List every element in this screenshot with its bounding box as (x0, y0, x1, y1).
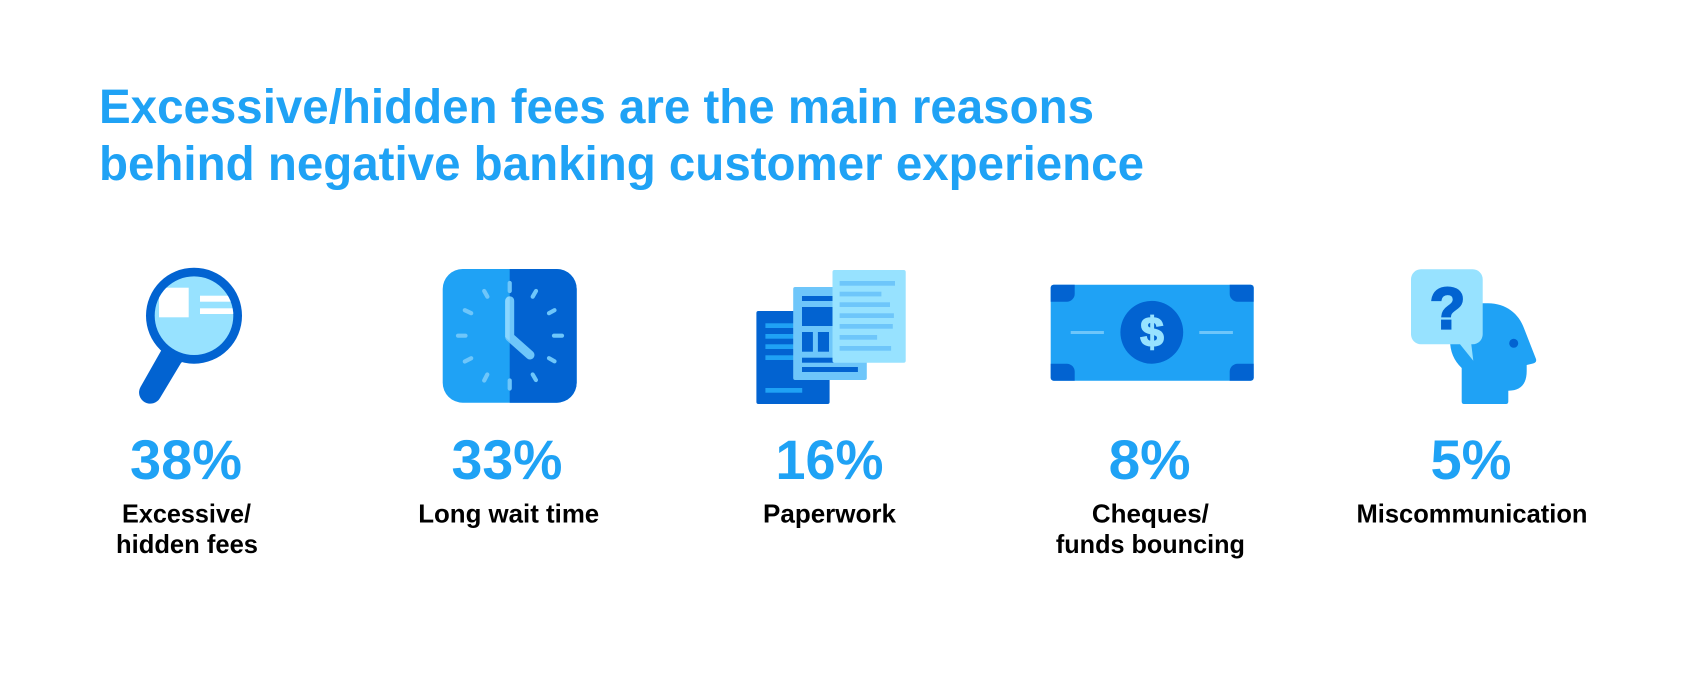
icon: banknote (1051, 285, 1254, 381)
label: cheques/funds bouncing: funds bouncing (1056, 529, 1245, 559)
icon: stacked documents (756, 270, 906, 404)
label: cheques/funds bouncing (1056, 498, 1245, 559)
stat: 5%: 5% (1430, 428, 1512, 491)
panel: cheques/funds bouncing (1051, 285, 1254, 559)
stat: 33%: 33% (452, 428, 562, 491)
title: Excessive/hidden fees are the main reasons (99, 81, 1094, 134)
panel: miscommunication (1356, 269, 1588, 528)
label: excessive/hidden fees (116, 498, 258, 559)
title: behind negative banking customer experience (99, 138, 1144, 191)
label: excessive/hidden fees: Excessive/ (122, 498, 251, 528)
panel: excessive/hidden fees (116, 268, 258, 559)
title (99, 81, 1144, 191)
icon: head with question bubble (1411, 269, 1536, 404)
label: long wait time: Long wait time (418, 498, 599, 528)
stat: 8%: 8% (1109, 428, 1191, 491)
panel: paperwork (756, 270, 906, 528)
stat: 38%: 38% (130, 428, 242, 491)
icon: banknote: $ (1140, 308, 1164, 356)
label: paperwork: Paperwork (763, 498, 897, 528)
icon: head with question bubble: ? (1430, 276, 1465, 342)
panel: long wait time (418, 269, 599, 528)
stat: 16%: 16% (776, 428, 884, 491)
icon: magnifying glass (139, 268, 242, 404)
icon: clock (443, 269, 577, 403)
label: cheques/funds bouncing: Cheques/ (1092, 498, 1209, 528)
label: excessive/hidden fees: hidden fees (116, 529, 258, 559)
label: miscommunication: Miscommunication (1356, 498, 1588, 528)
